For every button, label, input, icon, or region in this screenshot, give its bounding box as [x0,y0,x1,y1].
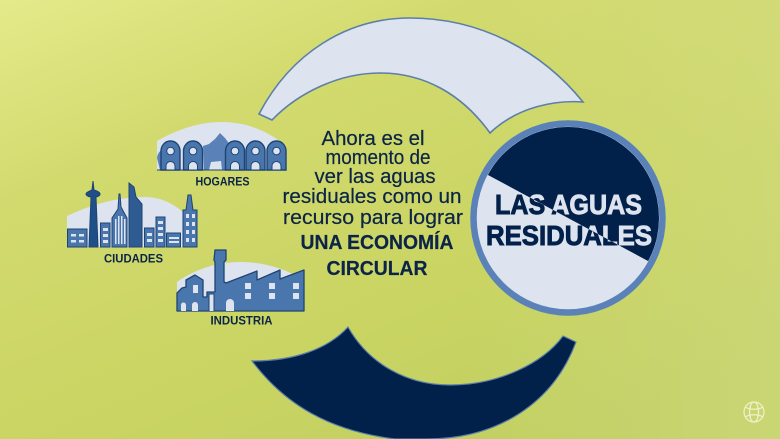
label: industria: INDUSTRIA [210,316,272,328]
icon: ciudades [67,181,197,247]
houses [161,141,286,170]
icon: globe logo [744,402,764,422]
circle: las aguas residuales: RESIDUALES [486,220,652,251]
icon: industria [177,250,304,311]
circle: las aguas residuales: RESIDUALES [486,220,652,251]
windows [71,214,195,244]
central text block [282,128,463,280]
central text block: residuales como un [282,186,462,208]
tv tower [86,181,100,247]
circle: las aguas residuales: LAS AGUAS [495,189,642,220]
circle: las aguas residuales [474,124,662,312]
tree [157,133,238,170]
chimney and factory [177,250,304,311]
windows [181,283,299,311]
buildings [68,229,87,247]
central text block: Ahora es el [322,128,424,150]
central text block: momento de [326,147,430,169]
bottom arc arrow [252,327,576,439]
central text block: UNA ECONOMÍA [300,231,454,254]
central text block: CIRCULAR [326,258,428,280]
icon: hogares [157,122,286,170]
top arc arrow [259,18,583,133]
central text block: ver las aguas [314,166,436,188]
central text block: recurso para lograr [283,207,463,229]
label: ciudades: CIUDADES [104,254,163,266]
label: hogares: HOGARES [196,176,250,188]
circle: las aguas residuales: LAS AGUAS [495,189,642,220]
